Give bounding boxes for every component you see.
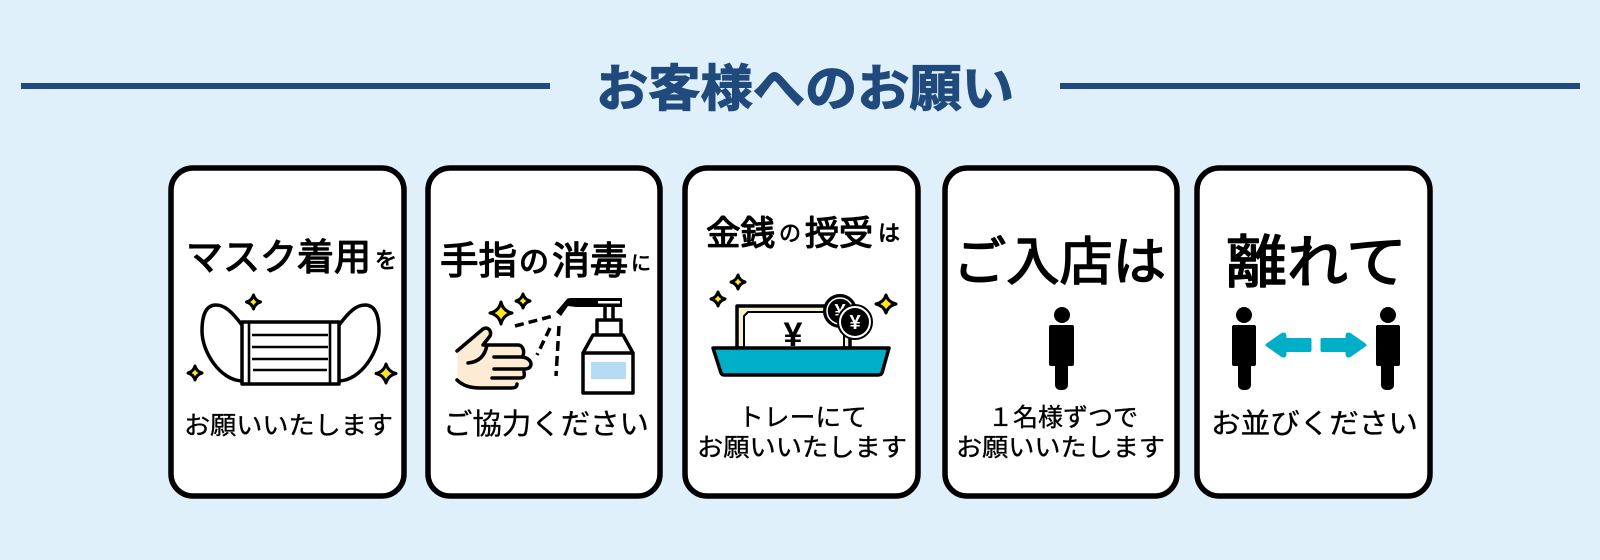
yen sign on banknote: ¥ xyxy=(784,316,803,354)
text: please: お願いいたします xyxy=(184,412,393,440)
heading: hand disinfection: に xyxy=(631,253,651,275)
heading: money exchange xyxy=(706,215,900,253)
title: header with rules xyxy=(21,61,1580,117)
heading: money exchange: 授受 xyxy=(805,215,873,253)
heading: money exchange: 金銭 xyxy=(706,215,775,253)
text: please line up: お並びください xyxy=(1211,408,1418,439)
heading: hand disinfection: 手指 xyxy=(440,241,517,283)
panel: entering the store xyxy=(945,168,1177,496)
text: tray request: トレーにて xyxy=(738,404,867,432)
panel: wear a mask xyxy=(171,168,404,496)
icon: hand and sanitizer bottle xyxy=(457,294,633,393)
heading: hand disinfection: 消毒 xyxy=(552,241,628,283)
heading: wear a mask: マスク着用 xyxy=(186,237,371,278)
heading: hand disinfection xyxy=(440,241,651,283)
heading: hand disinfection: の xyxy=(519,246,549,279)
panel: hand disinfection xyxy=(428,168,660,496)
panel: money exchange xyxy=(685,168,918,496)
icon: two people with distance arrows xyxy=(1232,307,1400,390)
heading: wear a mask: を xyxy=(375,248,397,273)
icon: cash tray with coins: ¥ xyxy=(834,301,846,323)
icon: person xyxy=(1049,307,1074,390)
icon: cash tray with coins xyxy=(711,275,896,375)
heading: entering the store: ご入店は xyxy=(953,234,1166,292)
heading: keep distance: 離れて xyxy=(1226,231,1407,295)
text: tray request: お願いいたします xyxy=(697,434,907,462)
heading: money exchange: の xyxy=(779,221,801,246)
icon: cash tray with coins: ¥ xyxy=(849,312,861,334)
text: one person at a time: １名様ずつで xyxy=(988,404,1138,432)
title: header with rules: お客様へのお願い xyxy=(596,61,1014,117)
panel: keep distance xyxy=(1197,168,1430,496)
text: please cooperate: ご協力ください xyxy=(443,408,649,441)
icon: face mask with sparkles xyxy=(188,295,396,384)
heading: money exchange: は xyxy=(878,221,900,246)
text: one person at a time: お願いいたします xyxy=(956,434,1165,462)
text: tray request xyxy=(697,404,907,462)
text: one person at a time xyxy=(956,404,1165,462)
